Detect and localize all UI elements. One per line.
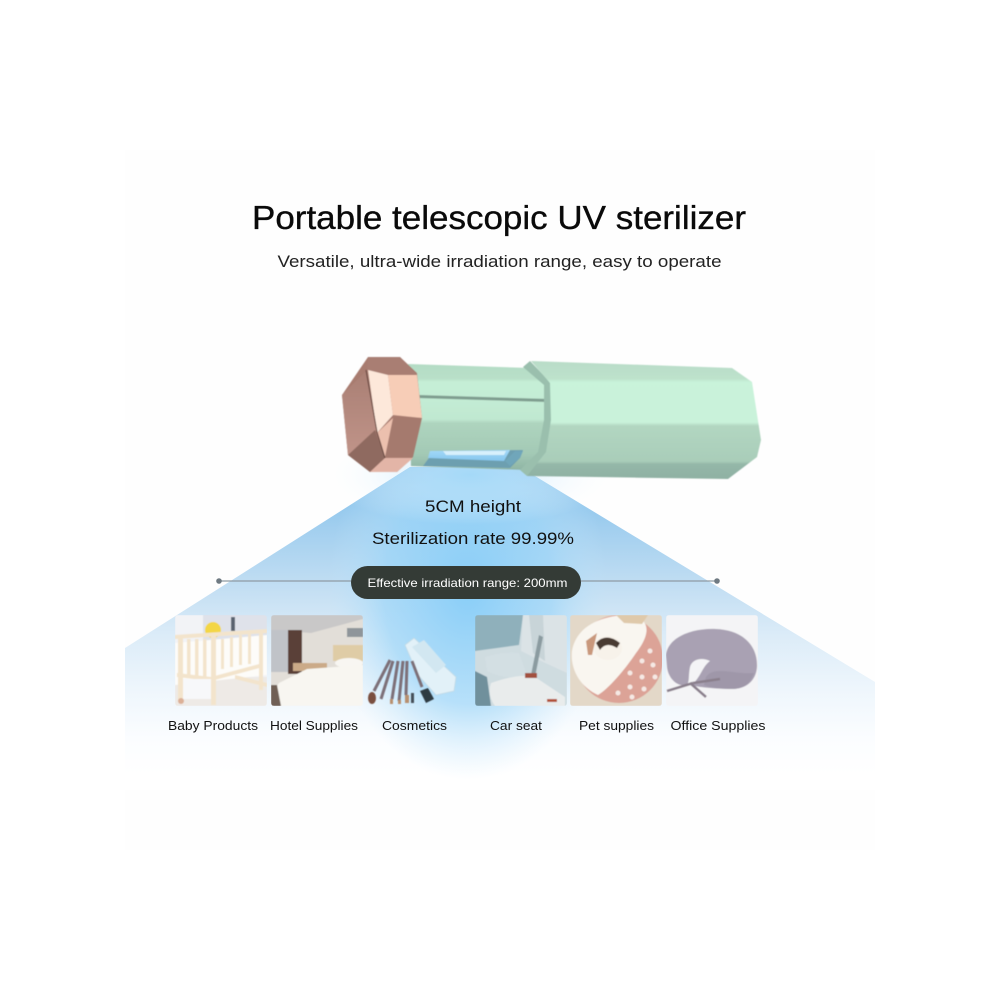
photo: baby crib [175,615,267,706]
device body [527,361,761,479]
neck groove [418,395,548,402]
beam halo [320,425,620,525]
photo: car seat [475,615,567,706]
text: sterilization rate: Sterilization rate 99.99% [372,529,574,548]
label: car seat: Car seat [490,718,542,733]
category labels [168,718,766,733]
light beam [125,467,875,790]
photo: pet bed with cat [570,615,663,706]
subtitle: Versatile, ultra-wide irradiation range, easy to operate [278,252,722,271]
device collar [520,361,552,476]
photo: hotel room [271,615,363,706]
label: baby products: Baby Products [168,718,259,733]
label: office supplies: Office Supplies [670,718,766,733]
range pill: Effective irradiation range: 200mm [368,576,568,590]
range line with end dots [216,578,720,584]
label: pet supplies: Pet supplies [579,718,655,733]
photo: neck pillow [666,615,758,706]
text: 5CM height: 5CM height [425,497,521,516]
device cap [342,357,422,472]
range pill [351,566,581,599]
label: cosmetics: Cosmetics [382,718,448,733]
device: UV sterilizer [342,357,761,479]
title: Portable telescopic UV sterilizer [252,199,746,236]
device neck [408,364,552,470]
photo: cosmetics brushes [368,638,456,704]
label: hotel supplies: Hotel Supplies [270,718,359,733]
UV lens [423,450,523,468]
